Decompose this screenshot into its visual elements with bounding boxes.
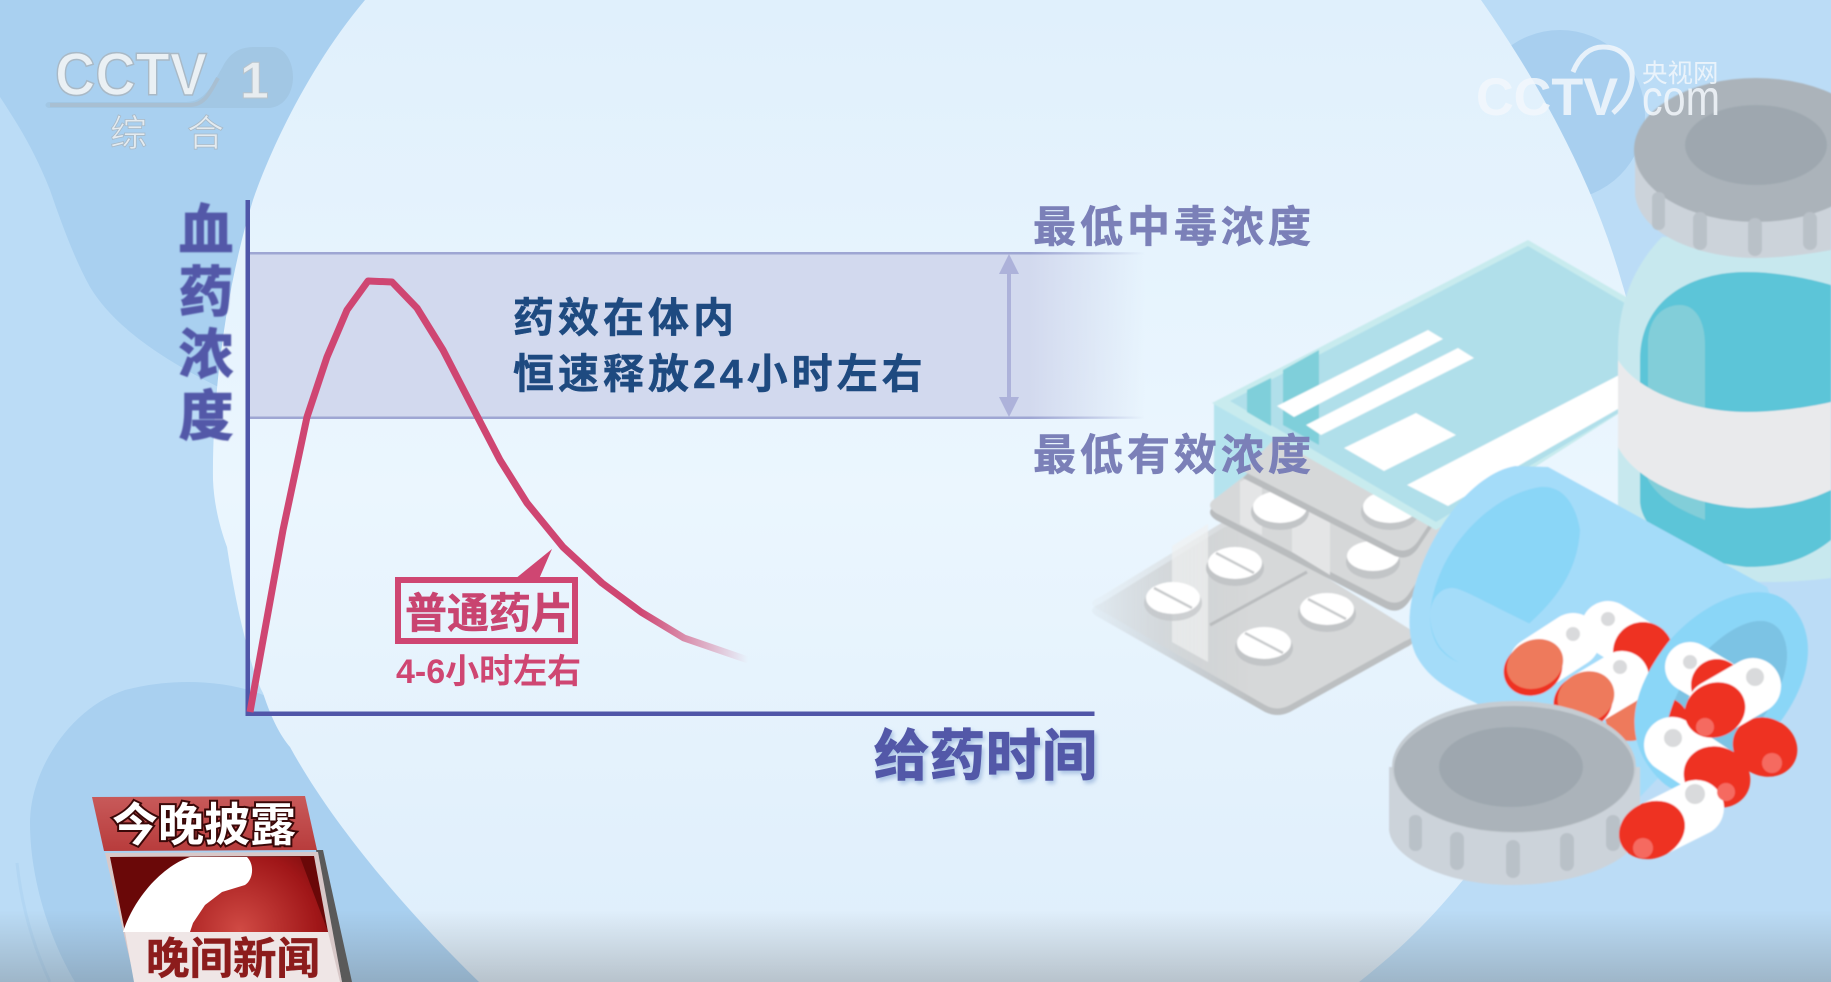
blister pack lower — [1092, 520, 1413, 715]
callout: ordinary tablet: 普通药片 — [405, 590, 573, 637]
CCTV-1 station logo: 合 — [187, 113, 224, 154]
band description text: 药效在体内 — [513, 295, 738, 341]
curve: ordinary tablet concentration — [250, 281, 748, 712]
bottle hole — [1665, 621, 1787, 774]
CCTV.com watermark: com — [1642, 70, 1720, 126]
tipped blue bottle — [1410, 466, 1790, 797]
band description text: 恒速释放24小时左右 — [513, 351, 927, 397]
bottle cap — [1634, 78, 1831, 258]
chart axes — [246, 200, 1094, 716]
CCTV-1 station logo — [46, 41, 293, 154]
effective concentration band — [250, 252, 1145, 419]
blue bottle rim — [1635, 592, 1808, 792]
news logo: tonight reveal — [92, 796, 352, 982]
CCTV.com watermark: CCTV — [1476, 68, 1618, 127]
bottle — [1618, 237, 1831, 582]
label: minimum effective concentration: 最低有效浓度 — [1033, 432, 1315, 480]
CCTV-1 station logo: 1 — [240, 52, 269, 110]
band description text — [513, 295, 927, 397]
x axis title: 给药时间 — [874, 725, 1098, 787]
globe panel — [105, 850, 352, 982]
capsules behind rim — [1495, 612, 1689, 749]
y axis title: 血 — [179, 201, 233, 261]
medicine box side — [1214, 403, 1440, 570]
y axis title: 浓 — [179, 325, 233, 385]
y axis title: 度 — [179, 387, 233, 447]
medicine box top — [1212, 240, 1640, 530]
bottom vignette — [0, 910, 1831, 982]
y axis title — [179, 201, 233, 447]
CCTV-1 station logo: 综 — [110, 113, 147, 154]
arrow: band range — [999, 254, 1019, 417]
medicine illustration — [1092, 78, 1831, 885]
callout: ordinary tablet: 4-6小时左右 — [396, 653, 581, 691]
bottle cap lying — [1389, 701, 1640, 885]
large light circle panel — [213, 0, 1646, 982]
blister pack upper — [1243, 413, 1450, 558]
y axis title: 药 — [179, 263, 233, 323]
capsules front — [1609, 655, 1807, 870]
label: minimum toxic concentration: 最低中毒浓度 — [1033, 204, 1315, 252]
blister pack middle — [1210, 433, 1450, 611]
CCTV.com watermark: 央视网 — [1642, 60, 1719, 88]
callout: ordinary tablet — [396, 549, 581, 691]
CCTV.com watermark — [1476, 47, 1720, 127]
CCTV-1 station logo: CCTV — [55, 41, 207, 108]
banner: 今晚披露 — [112, 799, 296, 851]
